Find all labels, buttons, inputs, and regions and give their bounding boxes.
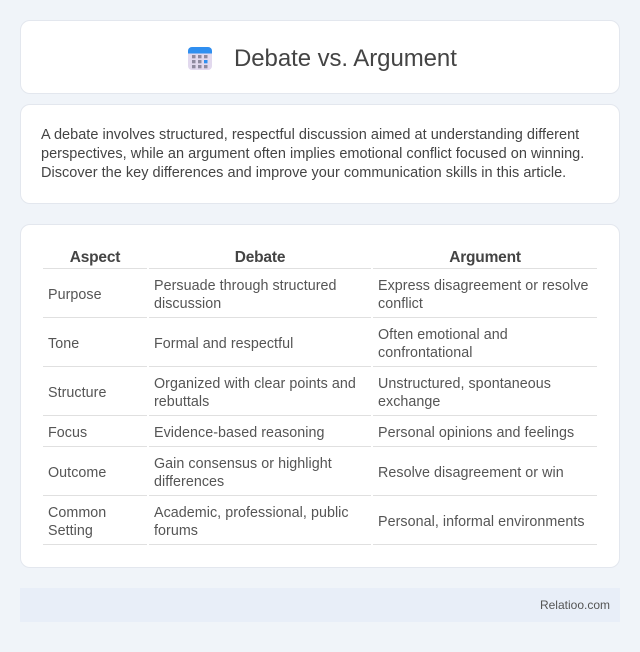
comparison table: Often emotional and — [378, 327, 508, 343]
row: Focus: Focus — [48, 425, 87, 441]
panel: comparison table — [20, 224, 620, 568]
column heading: Debate: Debate — [235, 249, 285, 266]
title card — [20, 20, 620, 94]
comparison table: discussion — [154, 296, 221, 312]
footer source text: Relatioo.com — [540, 598, 610, 612]
comparison table: exchange — [378, 394, 440, 410]
comparison table: differences — [154, 474, 224, 490]
row: Common Setting — [48, 505, 106, 539]
comparison table: Personal opinions and feelings — [378, 425, 574, 441]
title: Debate vs. Argument — [234, 45, 457, 72]
comparison table: conflict — [378, 296, 423, 312]
intro text — [41, 127, 584, 181]
row: Outcome: Outcome — [48, 465, 106, 481]
comparison table: Gain consensus or highlight — [154, 456, 332, 472]
icon: calendar — [188, 47, 212, 70]
comparison table: Formal and respectful — [154, 336, 293, 352]
comparison table: Evidence-based reasoning — [154, 425, 324, 441]
comparison table: Express disagreement or resolve — [378, 278, 589, 294]
footer bar — [20, 588, 620, 622]
comparison table: confrontational — [378, 345, 473, 361]
comparison table: forums — [154, 523, 198, 539]
row: Purpose: Purpose — [48, 287, 102, 303]
comparison table: Persuade through structured — [154, 278, 337, 294]
comparison table: Resolve disagreement or win — [378, 465, 564, 481]
comparison table: rebuttals — [154, 394, 209, 410]
comparison table: Academic, professional, public — [154, 505, 349, 521]
row: Common Setting: Common — [48, 505, 106, 521]
column heading: Argument: Argument — [449, 249, 521, 266]
row: Common Setting: Setting — [48, 523, 93, 539]
row: Structure: Structure — [48, 385, 106, 401]
intro text: perspectives, while an argument often implies emotional conflict focused on winning. — [41, 146, 584, 162]
row: Tone: Tone — [48, 336, 79, 352]
comparison table: Unstructured, spontaneous — [378, 376, 551, 392]
intro text: Discover the key differences and improve your communication skills in this article. — [41, 165, 566, 181]
intro text: A debate involves structured, respectful discussion aimed at understanding different — [41, 127, 579, 143]
panel: introduction — [20, 104, 620, 204]
column heading: Aspect: Aspect — [70, 249, 120, 266]
comparison table: Organized with clear points and — [154, 376, 356, 392]
comparison table: Personal, informal environments — [378, 514, 585, 530]
